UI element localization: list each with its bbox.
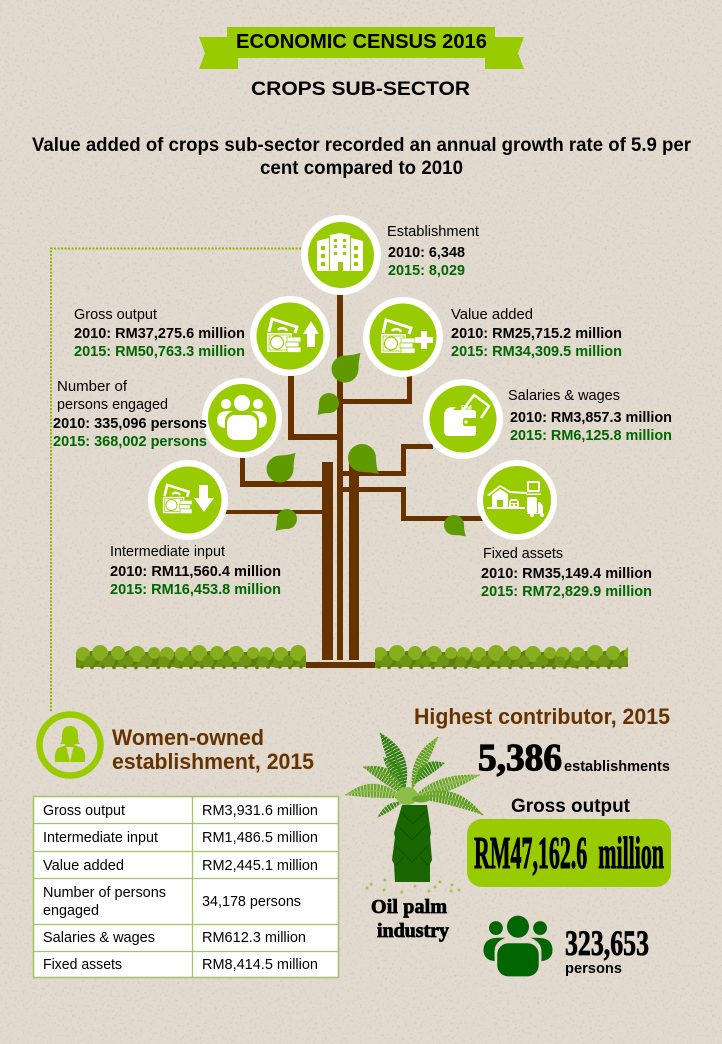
icon: persons engaged people (202, 378, 282, 458)
heading: women-owned establishment (112, 725, 314, 774)
table: women-owned establishment figures: Intermediate input (43, 830, 158, 846)
label: value added: Value added (451, 307, 533, 323)
label: intermediate input: Intermediate input (110, 544, 225, 560)
icon: woman in ring (40, 714, 100, 776)
label: fixed assets: 2015: RM72,829.9 million (481, 584, 652, 600)
icon: establishment building (301, 215, 381, 295)
headline statement: cent compared to 2010 (260, 158, 463, 179)
heading: gross output: Gross output (511, 796, 631, 817)
table: women-owned establishment figures: 34,178 persons (202, 894, 301, 910)
table: women-owned establishment figures: engaged (43, 903, 99, 919)
table: women-owned establishment figures: RM8,414.5 million (202, 957, 318, 973)
label: fixed assets: Fixed assets (483, 546, 563, 562)
table: women-owned establishment figures: Fixed assets (43, 957, 122, 973)
label: gross output: Gross output (74, 307, 157, 323)
tree trunk and branches (225, 290, 483, 668)
heading: women-owned establishment: Women-owned (112, 725, 264, 750)
label: intermediate input (110, 544, 281, 598)
table: women-owned establishment figures: Gross output (43, 803, 125, 819)
headline statement (32, 135, 692, 179)
label: salaries and wages: 2010: RM3,857.3 million (510, 410, 672, 426)
icon: salaries wallet: RM (461, 405, 472, 412)
heading: highest contributor: Highest contributor, 2015 (414, 704, 670, 729)
icon: gross output money with up arrow (250, 296, 330, 376)
subtitle: CROPS SUB-SECTOR (251, 78, 470, 100)
label: number of persons engaged: Number of (57, 379, 128, 395)
label: establishment (387, 224, 479, 279)
label: salaries and wages: 2015: RM6,125.8 million (510, 428, 672, 444)
label: establishment: Establishment (387, 224, 479, 240)
label: number of persons engaged: 2010: 335,096 persons (53, 416, 207, 432)
hedge ground strips (76, 645, 628, 670)
label: number of persons engaged (53, 379, 207, 450)
label: salaries and wages (508, 388, 672, 444)
label: value added: 2015: RM34,309.5 million (451, 344, 622, 360)
label: number of persons engaged: 2015: 368,002 persons (53, 434, 207, 450)
table: women-owned establishment figures: Salaries & wages (43, 930, 155, 946)
label: intermediate input: 2015: RM16,453.8 million (110, 582, 281, 598)
label: establishment: 2015: 8,029 (388, 263, 465, 279)
table: women-owned establishment figures: RM3,931.6 million (202, 803, 318, 819)
stat: persons: 323,653 (565, 923, 649, 963)
dotted connector from establishment to women-owned section (51, 248, 301, 712)
title ribbon: ECONOMIC CENSUS 2016 (236, 31, 487, 53)
table: women-owned establishment figures: Number of persons (43, 885, 166, 901)
icon: salaries wallet (423, 379, 503, 459)
table: women-owned establishment figures (33, 796, 339, 978)
leaves (266, 353, 466, 536)
icon: people dark green (484, 916, 552, 976)
label: establishment: 2010: 6,348 (388, 245, 465, 261)
label: value added (451, 307, 622, 360)
label: gross output: 2010: RM37,275.6 million (74, 326, 245, 342)
icon: fixed assets house, car, computer, truck (477, 460, 557, 540)
icon: oil palm tree (345, 733, 483, 894)
icon: intermediate input money with down arrow (148, 460, 228, 540)
headline statement: Value added of crops sub-sector recorded an annual growth rate of 5.9 per (32, 135, 692, 156)
caption: oil palm industry (371, 896, 449, 942)
label: gross output (74, 307, 245, 360)
label: gross output: 2015: RM50,763.3 million (74, 344, 245, 360)
title ribbon (199, 27, 524, 69)
table: women-owned establishment figures: Value added (43, 858, 124, 874)
stat: persons (565, 923, 649, 977)
label: fixed assets: 2010: RM35,149.4 million (481, 566, 652, 582)
stat box: gross output value (467, 819, 671, 887)
stat: establishments: establishments (564, 759, 670, 775)
stat: establishments (478, 737, 670, 779)
caption: oil palm industry: industry (377, 920, 449, 942)
label: salaries and wages: Salaries & wages (508, 388, 620, 404)
heading: women-owned establishment: establishment, 2015 (112, 749, 314, 774)
label: value added: 2010: RM25,715.2 million (451, 326, 622, 342)
table: women-owned establishment figures: RM2,445.1 million (202, 858, 318, 874)
table: women-owned establishment figures: RM1,486.5 million (202, 830, 318, 846)
caption: oil palm industry: Oil palm (371, 896, 447, 918)
label: number of persons engaged: persons engaged (57, 397, 168, 413)
icon: value added money with plus (363, 297, 443, 377)
label: fixed assets (481, 546, 652, 600)
stat: persons: persons (565, 961, 622, 977)
stat: establishments: 5,386 (478, 737, 562, 779)
table: women-owned establishment figures: RM612.3 million (202, 930, 306, 946)
label: intermediate input: 2010: RM11,560.4 million (110, 564, 281, 580)
